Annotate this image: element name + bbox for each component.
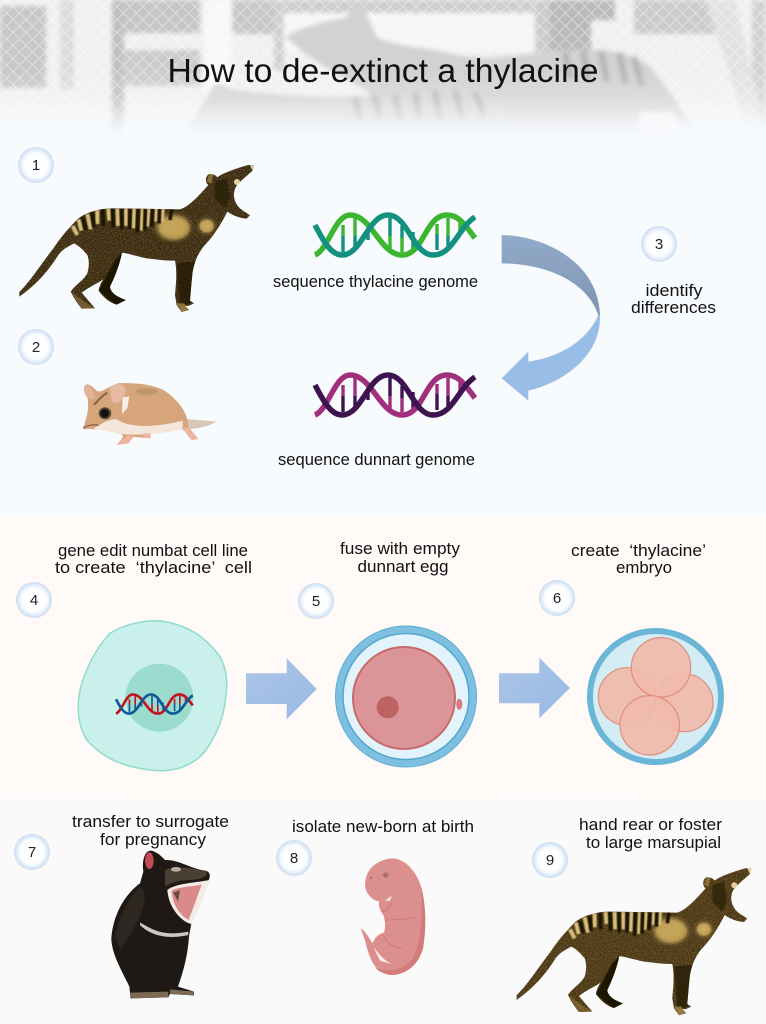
thylacine illustration, step 9	[497, 843, 766, 1023]
step 9 badge: 9	[546, 852, 554, 869]
title: How to de-extinct a thylacine	[168, 52, 598, 89]
label: sequence dunnart genome: sequence dunnart genome	[278, 451, 475, 469]
four-cell embryo	[590, 631, 721, 762]
label: create thylacine embryo: embryo	[616, 559, 672, 577]
step 8 badge: 8	[290, 850, 298, 867]
dunnart illustration	[83, 383, 217, 445]
label: gene edit numbat cell line: gene edit numbat cell line	[58, 542, 248, 560]
step 9 badge	[532, 842, 568, 878]
step 4 badge	[16, 582, 52, 618]
step 2 badge: 2	[32, 339, 40, 356]
label: identify differences	[631, 282, 716, 317]
label: identify differences: differences	[631, 299, 716, 317]
step 6 badge	[539, 580, 575, 616]
step 3 badge	[641, 226, 677, 262]
arrow: cell to egg	[246, 658, 317, 719]
label: create thylacine embryo	[571, 542, 706, 577]
step 7 badge	[14, 834, 50, 870]
step 7 badge: 7	[28, 844, 36, 861]
newborn joey embryo	[361, 858, 425, 975]
step 6 badge: 6	[553, 590, 561, 607]
step 2 badge	[18, 329, 54, 365]
label: isolate new-born at birth: isolate new-born at birth	[292, 818, 474, 836]
label: fuse with empty dunnart egg	[340, 540, 461, 576]
label: create thylacine embryo: create ‘thylacine’	[571, 542, 706, 560]
label: transfer to surrogate for pregnancy	[72, 813, 229, 849]
step 5 badge	[298, 583, 334, 619]
panel: birth and rearing background	[0, 775, 766, 1024]
label: transfer to surrogate for pregnancy: transfer to surrogate	[72, 813, 229, 831]
arrow: egg to embryo	[499, 658, 570, 718]
label: gene edit numbat cell line	[55, 542, 252, 577]
egg cell	[336, 626, 476, 767]
step 8 badge	[276, 840, 312, 876]
label: hand rear or foster to large marsupial: hand rear or foster	[579, 816, 723, 834]
DNA helix: dunnart genome	[315, 375, 475, 415]
label: hand rear or foster to large marsupial: to large marsupial	[586, 834, 721, 852]
label: identify differences: identify	[646, 282, 703, 300]
Tasmanian devil	[111, 851, 210, 998]
step 3 badge: 3	[655, 236, 663, 253]
curved arrow from thylacine to dunnart genome	[502, 235, 600, 401]
step 1 badge	[18, 147, 54, 183]
DNA helix: thylacine genome	[315, 215, 475, 255]
label: gene edit numbat cell line: to create ‘thylacine’ cell	[55, 559, 252, 577]
thylacine illustration, step 1	[0, 140, 270, 320]
label: hand rear or foster to large marsupial	[579, 816, 723, 852]
label: sequence thylacine genome: sequence thylacine genome	[273, 273, 478, 291]
header photo: thylacines in enclosure	[0, 0, 766, 142]
cell with nucleus and DNA	[78, 621, 227, 771]
step 5 badge: 5	[312, 593, 320, 610]
panel: genome sequencing background	[0, 0, 766, 515]
label: fuse with empty dunnart egg: dunnart egg	[358, 558, 448, 576]
step 4 badge: 4	[30, 592, 38, 609]
panel: cell engineering background	[0, 515, 766, 790]
label: fuse with empty dunnart egg: fuse with empty	[340, 540, 461, 558]
step 1 badge: 1	[32, 157, 40, 174]
label: transfer to surrogate for pregnancy: for pregnancy	[100, 831, 207, 849]
